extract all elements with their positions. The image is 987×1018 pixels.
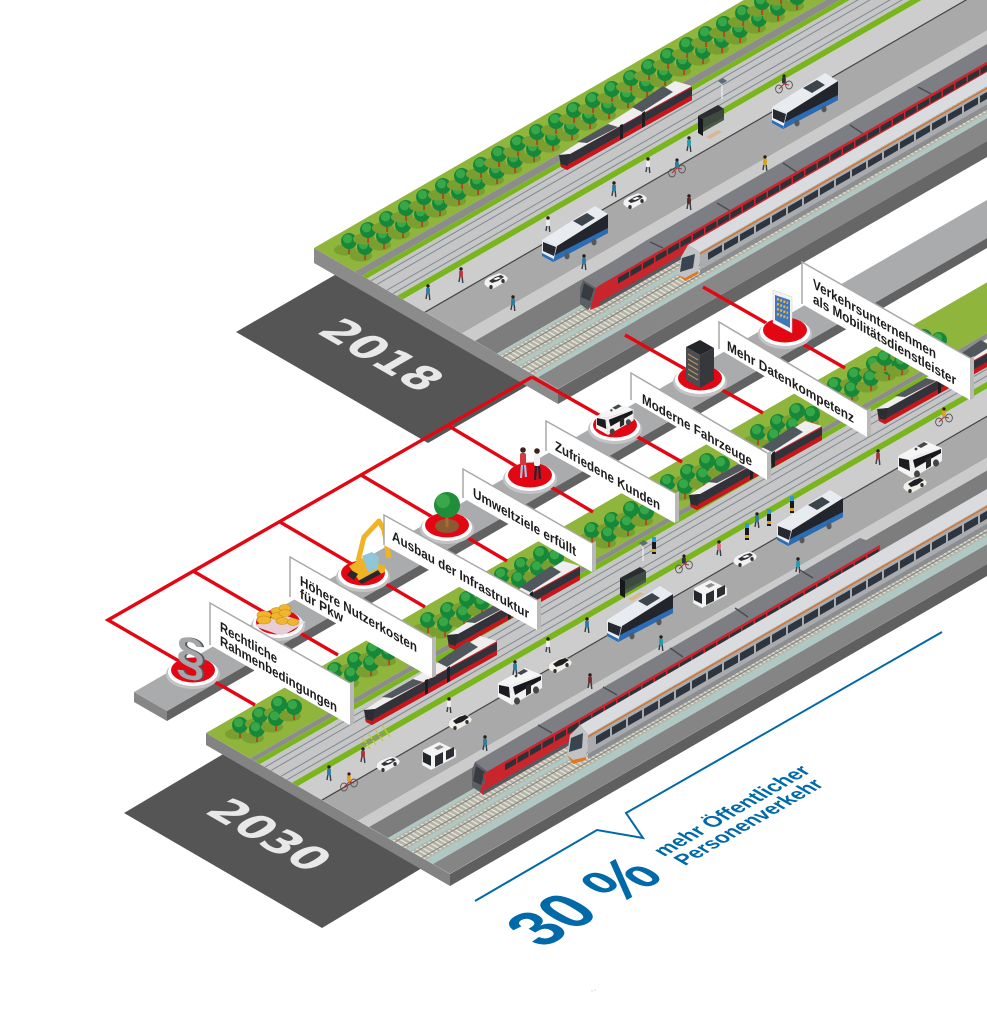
street layer 2030 xyxy=(206,214,987,886)
icon: paragraph sign: § xyxy=(176,625,205,689)
marker: tree xyxy=(420,492,474,544)
plate 2018 with year xyxy=(236,272,532,443)
label: Mehr Datenkompetenz: Mehr Datenkompetenz xyxy=(727,338,854,427)
icon: smartphone xyxy=(773,290,792,333)
shelter and sign 2030 xyxy=(620,540,648,601)
tree rows 2018 xyxy=(334,0,805,262)
regional train white-orange 2030 xyxy=(567,489,987,764)
label: Höhere Nutzerkosten für Pkw: Höhere Nutzerkosten xyxy=(300,573,417,656)
cars 2018 xyxy=(484,193,647,289)
year 2018: 2018 xyxy=(305,312,456,399)
marker: money xyxy=(251,604,306,641)
marker: excavator xyxy=(336,521,390,592)
cars 2030 xyxy=(376,477,927,772)
people 2018 xyxy=(426,74,792,311)
icon: banknotes and coins xyxy=(254,604,306,636)
icon: paragraph sign: § xyxy=(178,625,207,689)
caption line 1: mehr Öffentlicher xyxy=(647,761,817,859)
icon: server rack xyxy=(686,340,714,388)
label: Moderne Fahrzeuge: Moderne Fahrzeuge xyxy=(642,391,752,470)
big figure: 30 % xyxy=(487,846,679,956)
shelter and sign 2018 xyxy=(698,78,727,139)
regional train red 2018 xyxy=(580,44,987,310)
bike rack 2030 xyxy=(362,725,390,749)
caption line 2: Personenverkehr xyxy=(668,775,830,868)
year 2030: 2030 xyxy=(193,792,344,879)
callout: 30 % more public transport xyxy=(475,632,942,956)
marker: paragraph xyxy=(166,625,220,689)
label: Rechtliche Rahmenbedingungen xyxy=(210,603,354,725)
label: Rechtliche Rahmenbedingungen: Rechtliche xyxy=(220,619,277,668)
tram 2018 xyxy=(559,81,692,170)
mid plate: beam carrying the success factors xyxy=(134,200,987,721)
label: Verkehrsunternehmen als Mobilitätsdienstleister: als Mobilitätsdienstleister xyxy=(813,291,956,389)
trees 2030 xyxy=(225,329,947,744)
marker: server xyxy=(673,340,727,397)
label: Höhere Nutzerkosten für Pkw: für Pkw xyxy=(300,586,343,627)
label: Umweltziele erfüllt: Umweltziele erfüllt xyxy=(473,485,576,560)
marker: phone xyxy=(758,290,812,349)
buses 2030 xyxy=(607,490,843,642)
people 2030 xyxy=(327,407,952,791)
callout outline xyxy=(475,632,942,901)
marker: vehicles xyxy=(588,404,642,444)
label: Rechtliche Rahmenbedingungen: Rahmenbedingungen xyxy=(220,633,337,716)
label: Zufriedene Kunden: Zufriedene Kunden xyxy=(555,438,660,514)
red connector network xyxy=(108,287,845,705)
icon: modern vehicle xyxy=(596,404,634,435)
marker: customers xyxy=(503,447,557,494)
plate 2030 with year xyxy=(124,753,422,928)
label: Ausbau der Infrastruktur: Ausbau der Infrastruktur xyxy=(392,528,529,623)
label: Verkehrsunternehmen als Mobilitätsdienstleister: Verkehrsunternehmen xyxy=(813,276,936,363)
icon: tree xyxy=(434,492,460,533)
icon: two people xyxy=(520,447,540,480)
regional train red 2030 xyxy=(472,538,880,795)
street layer 2018 xyxy=(314,0,987,404)
icon: excavator xyxy=(347,521,389,584)
label: Verkehrsunternehmen als Mobilitätsdienstleister xyxy=(802,262,974,400)
autonomous shuttles 2030 xyxy=(422,441,942,770)
trams 2030 xyxy=(364,335,987,725)
regional train white-orange 2018 xyxy=(678,72,987,281)
buses 2018 xyxy=(542,73,838,262)
charging poles 2030 xyxy=(652,496,794,554)
